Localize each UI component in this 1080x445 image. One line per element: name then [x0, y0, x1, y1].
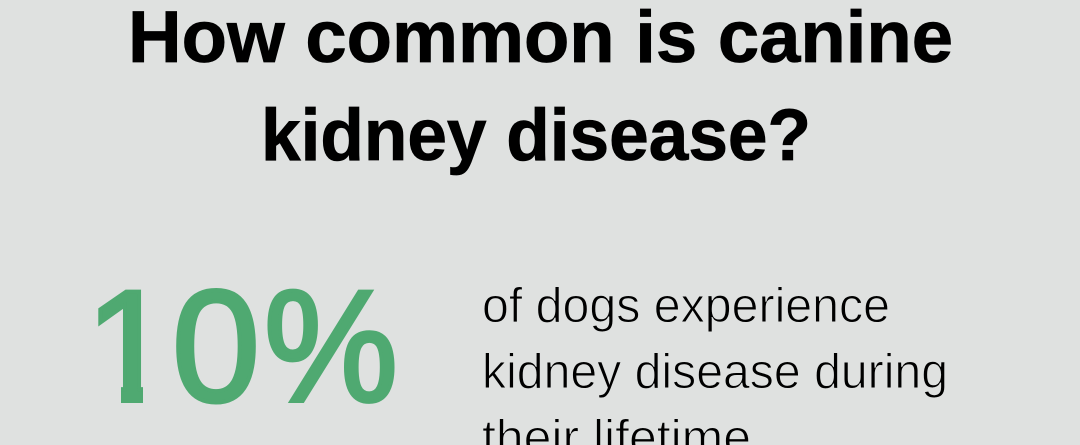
description text: of dogs experience — [482, 279, 890, 333]
description text: kidney disease during — [482, 345, 948, 399]
statistic: 10%: % — [264, 257, 398, 435]
statistic: 10%: 1 — [85, 257, 173, 435]
description text — [482, 279, 948, 445]
statistic: 10% — [85, 257, 398, 435]
title: kidney disease? — [261, 95, 811, 176]
title — [128, 0, 953, 176]
statistic: 10%: 0 — [172, 257, 260, 435]
